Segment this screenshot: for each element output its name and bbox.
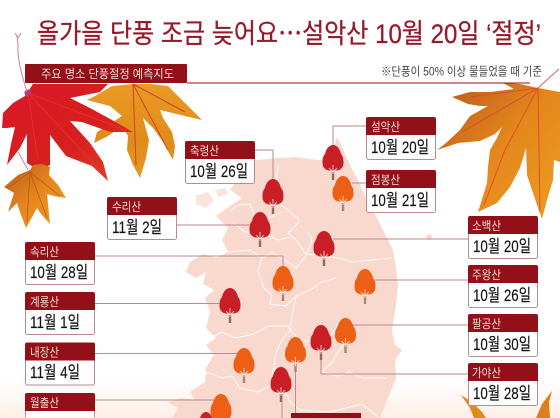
card: 축령산: 10월 26일 xyxy=(190,162,248,181)
leaf: orange upper right xyxy=(437,83,560,219)
card: 내장산: 11월 4일 xyxy=(30,363,80,382)
card: 속리산: 속리산 xyxy=(30,245,59,259)
card: 속리산 xyxy=(25,242,95,284)
card: 소백산 xyxy=(468,216,538,258)
card: 점봉산: 점봉산 xyxy=(371,173,400,187)
card: 점봉산: 10월 21일 xyxy=(371,191,429,210)
card: 내장산: 내장산 xyxy=(30,346,59,360)
subtitle bar xyxy=(25,64,530,83)
card: 소백산: 10월 20일 xyxy=(473,237,531,256)
card: cut-off header at bottom edge xyxy=(291,413,361,418)
card: 팔공산: 10월 30일 xyxy=(473,335,531,354)
card: 계룡산: 11월 1일 xyxy=(30,313,80,332)
card: 내장산 xyxy=(25,342,95,385)
leaf: orange upper left xyxy=(87,84,202,178)
card: 소백산: 소백산 xyxy=(472,219,501,233)
card: 팔공산 xyxy=(468,314,538,356)
card: 월출산: 월출산 xyxy=(30,396,59,410)
card: 수리산 xyxy=(107,197,177,240)
card: 계룡산 xyxy=(25,292,95,334)
leaf: bottom right fragments xyxy=(461,391,552,418)
card: 가야산: 10월 28일 xyxy=(473,384,531,403)
card: 점봉산 xyxy=(366,170,436,212)
card: 수리산: 수리산 xyxy=(112,200,141,214)
leaf: small orange left xyxy=(4,164,66,228)
card: 축령산: 축령산 xyxy=(190,144,219,158)
trees on map xyxy=(200,145,376,418)
card: 속리산: 10월 28일 xyxy=(30,263,88,282)
card: 주왕산: 주왕산 xyxy=(472,268,501,282)
card: 수리산: 11월 2일 xyxy=(112,218,162,237)
card: 축령산 xyxy=(185,141,255,184)
card: 설악산 xyxy=(366,117,436,160)
card: 주왕산: 10월 26일 xyxy=(473,286,531,305)
connector lines xyxy=(95,126,468,418)
card: 설악산: 설악산 xyxy=(371,120,400,134)
map of South Korea xyxy=(168,137,432,418)
leaf stems xyxy=(15,33,559,170)
leaf: red upper left xyxy=(2,84,133,181)
card: 가야산 xyxy=(468,363,538,406)
card: 주왕산 xyxy=(468,265,538,308)
card: 팔공산: 팔공산 xyxy=(472,317,501,331)
card: 월출산 xyxy=(25,393,95,418)
card: 설악산: 10월 20일 xyxy=(371,138,429,157)
title: 올가을 단풍 조금 늦어요…설악산 10월 20일 ‘절정’ xyxy=(37,12,541,51)
card: 계룡산: 계룡산 xyxy=(30,295,59,309)
background xyxy=(0,380,560,418)
card: 가야산: 가야산 xyxy=(472,366,501,380)
subtitle bar: 주요 명소 단풍절정 예측지도 xyxy=(41,67,174,81)
